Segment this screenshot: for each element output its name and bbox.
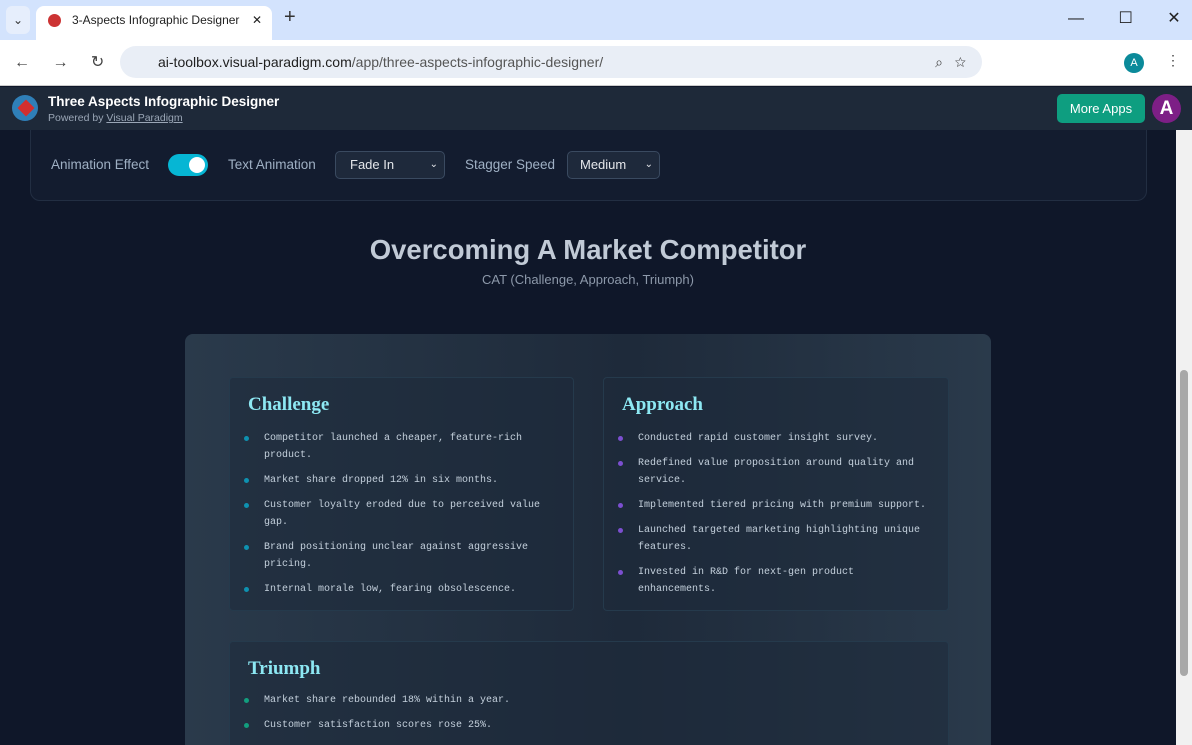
list: approach: Conducted rapid customer insight survey.	[638, 433, 878, 444]
tab list button: ⌄	[13, 13, 23, 27]
control panel: ⌄	[645, 159, 653, 170]
control panel: ⌄	[430, 159, 438, 170]
active tab	[36, 6, 272, 40]
heading: approach: Approach	[622, 394, 703, 415]
list: challenge	[244, 432, 540, 595]
heading: challenge: Challenge	[248, 394, 329, 415]
scrollbar	[1176, 130, 1192, 745]
active tab: ✕	[252, 13, 262, 27]
panel: triumph	[229, 641, 949, 745]
address bar row	[0, 40, 1192, 86]
control panel: Medium	[580, 157, 626, 172]
subtitle: CAT (Challenge, Approach, Triumph)	[482, 272, 694, 287]
avatar	[1152, 94, 1181, 123]
title: Overcoming A Market Competitor	[370, 234, 806, 265]
text animation select: Text Animation	[228, 157, 316, 172]
app header	[0, 87, 1192, 130]
address bar row: ⋮	[1166, 52, 1180, 68]
tab list button	[6, 6, 30, 34]
window controls: — ☐ ✕	[1068, 10, 1181, 27]
animation effect toggle: Animation Effect	[51, 157, 149, 172]
panel: approach	[603, 377, 949, 611]
list: challenge: Customer loyalty eroded due to perceived value gap.	[264, 500, 540, 528]
list: approach: Implemented tiered pricing with premium support.	[638, 500, 926, 511]
list: challenge: Market share dropped 12% in six months.	[264, 475, 498, 486]
list: challenge: Internal morale low, fearing obsolescence.	[264, 584, 516, 595]
heading: triumph: Triumph	[248, 658, 321, 679]
address bar row: ← → ↻	[14, 54, 104, 71]
panel: challenge	[229, 377, 574, 611]
active tab: 3-Aspects Infographic Designer	[72, 13, 239, 27]
list: approach: Redefined value proposition around quality and service.	[638, 458, 914, 486]
list: triumph: Customer satisfaction scores rose 25%.	[264, 720, 492, 731]
infographic card	[185, 334, 991, 745]
more apps button	[1057, 94, 1145, 123]
more apps button: More Apps	[1070, 101, 1132, 116]
profile	[1124, 53, 1144, 73]
control panel: Fade In	[350, 157, 394, 172]
url field	[120, 46, 982, 78]
list: approach: Launched targeted marketing highlighting unique features.	[638, 525, 920, 553]
list: challenge: Brand positioning unclear against aggressive pricing.	[264, 542, 528, 570]
app header: Powered by Visual Paradigm	[48, 112, 183, 124]
avatar: A	[1160, 98, 1173, 119]
list: approach: Invested in R&D for next-gen product enhancements.	[638, 567, 854, 595]
url field: ⌕ ☆	[935, 54, 966, 70]
control panel	[30, 110, 1147, 201]
profile: A	[1130, 57, 1138, 69]
app title: Three Aspects Infographic Designer	[48, 94, 279, 109]
list: approach	[618, 432, 926, 595]
url field: ai-toolbox.visual-paradigm.com/app/three-aspects-infographic-designer/	[158, 54, 603, 70]
list: challenge: Competitor launched a cheaper, feature-rich product.	[264, 433, 522, 461]
new tab: +	[284, 6, 296, 28]
list: triumph: Market share rebounded 18% within a year.	[264, 695, 510, 706]
list: triumph	[244, 694, 510, 731]
browser tab bar	[0, 0, 1192, 40]
stagger speed select: Stagger Speed	[465, 157, 555, 172]
logo	[12, 95, 38, 121]
